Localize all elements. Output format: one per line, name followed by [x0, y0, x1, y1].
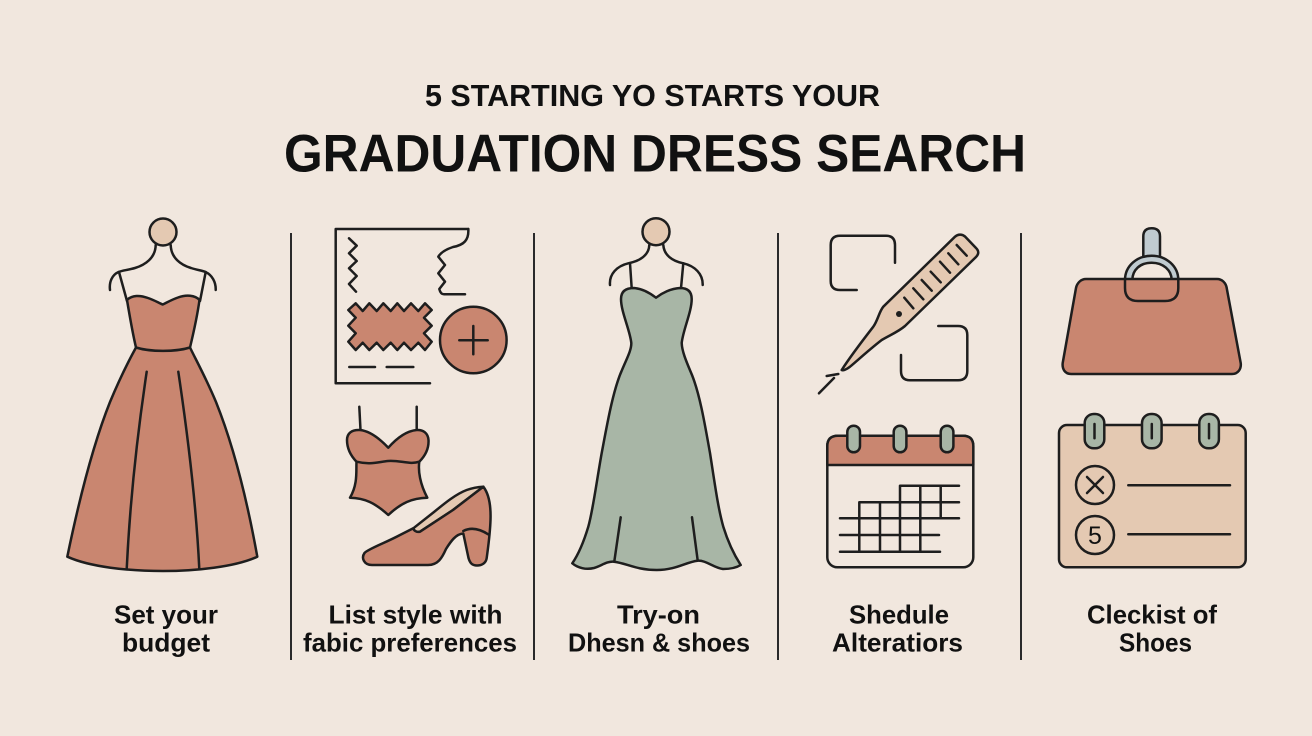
icon: plus circle [440, 307, 507, 373]
label [1087, 600, 1217, 658]
label: Alteratiors [832, 628, 963, 658]
label: Try-on [617, 600, 700, 630]
label: List style with [328, 600, 502, 630]
label [114, 600, 218, 658]
label: fabic preferences [303, 628, 517, 658]
icon: sage gown on mannequin [572, 218, 741, 570]
label [568, 600, 750, 658]
icon: checklist notepad [1059, 414, 1246, 567]
label: budget [122, 628, 210, 658]
label [832, 600, 963, 658]
icon: corner brackets [831, 236, 967, 380]
subtitle line: 5 STARTING YO STARTS YOUR [425, 79, 880, 113]
label [303, 600, 517, 658]
label: Shoes [1119, 628, 1192, 658]
panel: try-on dress and shoes [568, 218, 750, 657]
icon: fabric swatch sheet [336, 229, 468, 383]
panel: set your budget [67, 218, 257, 658]
panel: schedule alterations [819, 235, 978, 657]
title [284, 79, 1026, 184]
icon: checklist notepad: 5 [1088, 522, 1102, 550]
panel: list style with fabric preferences [303, 229, 517, 658]
label: Shedule [849, 600, 949, 630]
label: Dhesn & shoes [568, 628, 750, 658]
icon: terracotta dress on mannequin [67, 218, 257, 571]
icon: calendar [827, 426, 973, 567]
label: Cleckist of [1087, 600, 1217, 630]
main heading: GRADUATION DRESS SEARCH [284, 124, 1026, 184]
icon: camisole top [347, 407, 429, 515]
icon: handbag [1063, 228, 1241, 374]
label: Set your [114, 600, 218, 630]
icon: heeled shoe [363, 487, 491, 566]
panel: checklist of shoes [1059, 228, 1246, 658]
icon: measuring tool [819, 235, 978, 393]
